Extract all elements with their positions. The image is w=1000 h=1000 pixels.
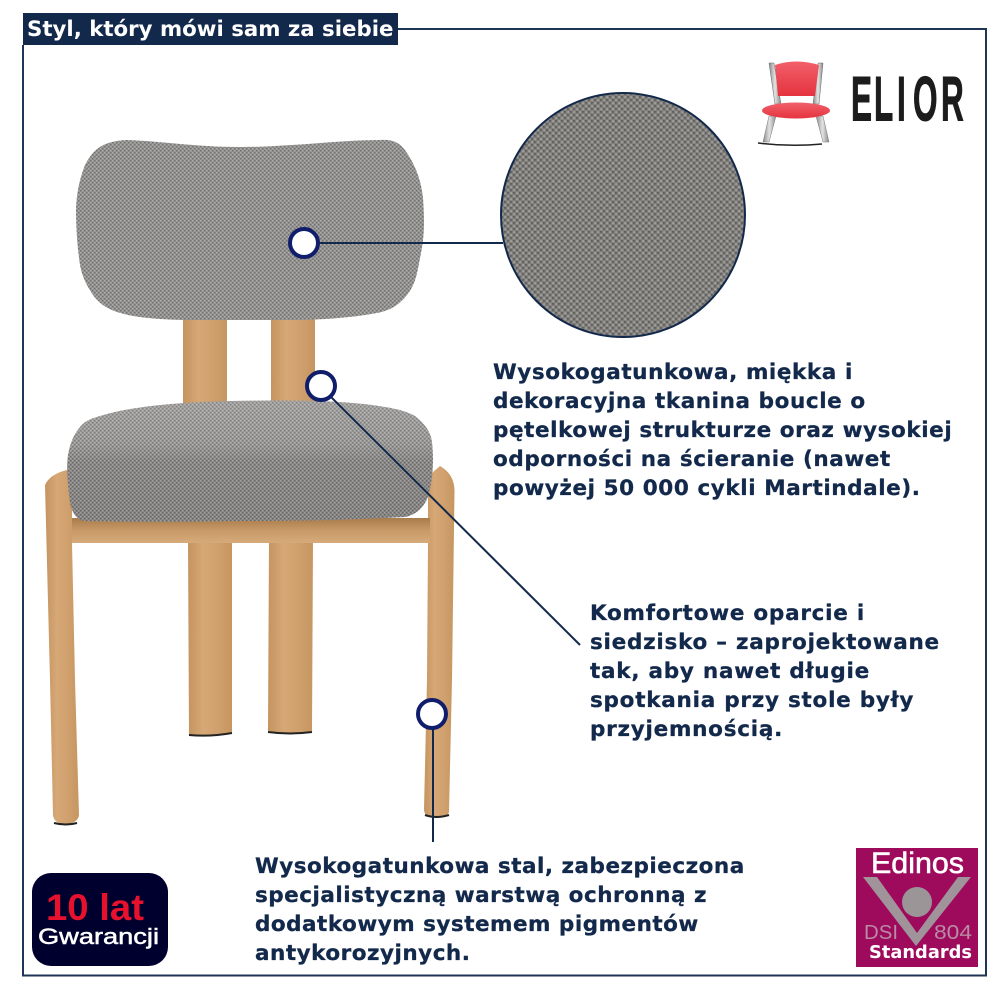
logo: Elior (758, 62, 964, 145)
fabric close-up circle (501, 93, 745, 337)
marker: backrest (290, 229, 318, 257)
connector: seat to comfort text (331, 397, 580, 645)
text: fabric description: pętelkowej strukturze oraz wysokiej (493, 418, 952, 443)
text: comfort description: przyjemnością. (590, 717, 783, 742)
text: fabric description: dekoracyjna tkanina boucle o (493, 389, 866, 414)
connector: backrest to fabric circle (318, 242, 503, 244)
text: steel description: specjalistyczną warstwą ochronną z (255, 883, 707, 908)
text: steel description: dodatkowym systemem pigmentów (255, 912, 699, 937)
title: Styl, który mówi sam za siebie (27, 17, 393, 42)
illustration: upholstered chair (45, 140, 454, 825)
text: comfort description: Komfortowe oparcie i (590, 601, 865, 626)
badge: Edinos standards (856, 847, 978, 967)
icon: red chair (758, 62, 830, 145)
text: comfort description: spotkania przy stole były (590, 688, 914, 713)
connector: leg to steel text (432, 728, 434, 842)
badge: Edinos standards: Edinos (871, 847, 964, 880)
marker: seat (307, 372, 335, 400)
rear legs (188, 540, 313, 736)
badge: Edinos standards: 804 (934, 922, 972, 944)
text: steel description: Wysokogatunkowa stal, zabezpieczona (255, 854, 745, 879)
seat cushion (67, 401, 433, 522)
text: comfort description: tak, aby nawet długie (590, 659, 870, 684)
text: fabric description: Wysokogatunkowa, miękka i (493, 360, 853, 385)
text: fabric description: powyżej 50 000 cykli Martindale). (493, 476, 920, 501)
badge: 10 years warranty: Gwarancji (38, 924, 159, 949)
wordmark: ELIOR (851, 64, 964, 134)
text: steel description: antykorozyjnych. (255, 941, 470, 966)
badge: 10 years warranty: 10 lat (46, 887, 144, 928)
front legs and rail (45, 466, 454, 824)
badge: 10 years warranty (32, 873, 168, 966)
badge: Edinos standards: Standards (869, 942, 972, 963)
text: fabric description: odporności na ścieranie (nawet (493, 447, 891, 472)
text: comfort description: siedzisko – zaprojektowane (590, 630, 940, 655)
backrest cushion (76, 140, 424, 320)
back posts (183, 316, 315, 404)
badge: Edinos standards: DSI (864, 922, 898, 944)
marker: leg (418, 700, 446, 728)
